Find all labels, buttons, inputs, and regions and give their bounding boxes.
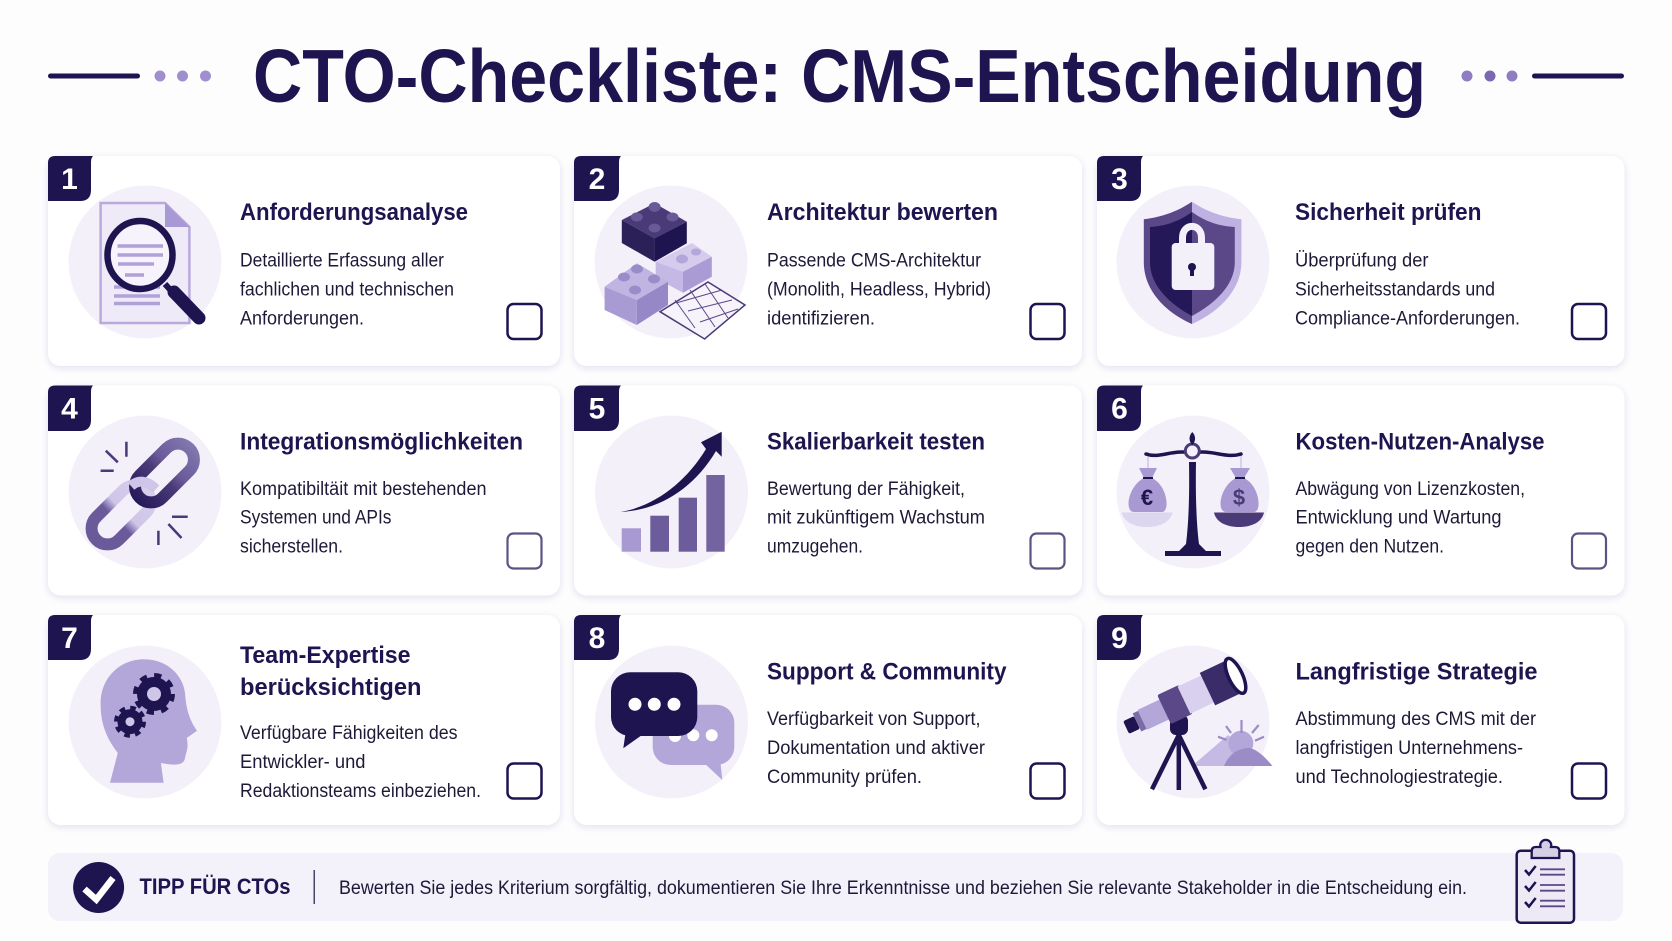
heading: Architektur bewerten — [767, 199, 998, 226]
panel: 5 Skalierbarkeit testen — [574, 386, 1082, 596]
heading: Integrationsmöglichkeiten — [240, 428, 523, 456]
description: Anforderungen. — [240, 308, 364, 330]
heading: Sicherheit prüfen — [1295, 199, 1482, 226]
header — [48, 34, 1624, 118]
heading: Kosten-Nutzen-Analyse — [1296, 428, 1544, 456]
panel: 1 Anforderungsanalyse — [48, 156, 560, 366]
description: Abstimmung des CMS mit der — [1296, 709, 1537, 730]
checkbox — [1030, 764, 1064, 798]
checkbox — [1030, 534, 1064, 568]
description: Passende CMS-Architektur — [767, 250, 982, 272]
heading: Team-Expertise — [240, 642, 410, 669]
description: mit zukünftigem Wachstum — [767, 508, 985, 528]
description — [240, 479, 486, 558]
icon: clipboard checklist — [1517, 840, 1574, 923]
icon: balance scale with money bags: € — [1141, 485, 1153, 510]
heading: Support & Community — [767, 658, 1007, 686]
description: Sicherheitsstandards und — [1295, 280, 1495, 300]
description — [767, 250, 991, 330]
description: Systemen und APIs — [240, 508, 392, 528]
checkbox — [1572, 764, 1606, 798]
description: gegen den Nutzen. — [1296, 536, 1444, 558]
heading: Anforderungsanalyse — [240, 199, 468, 226]
icon: head with gears — [68, 646, 222, 798]
tip label: TIPP FÜR CTOs — [140, 874, 290, 899]
number badge 3 — [1097, 156, 1143, 201]
number badge 2 — [574, 156, 621, 201]
number badge 4: 4 — [61, 392, 78, 426]
number badge 1 — [48, 156, 93, 201]
panel: 4 Integrationsmöglichkeiten — [48, 386, 560, 596]
tip bar — [48, 840, 1623, 923]
number badge 6: 6 — [1111, 392, 1128, 426]
icon: telescope with mountains and sun — [1116, 646, 1272, 798]
description: Community prüfen. — [767, 767, 922, 788]
icon: balance scale with money bags: $ — [1233, 485, 1245, 510]
left header ornament — [48, 70, 211, 82]
checkbox — [1572, 534, 1606, 568]
description: fachlichen und technischen — [240, 280, 454, 300]
description: Abwägung von Lizenzkosten, — [1296, 479, 1525, 500]
number badge 5 — [574, 386, 621, 431]
icon: building blocks and blueprint — [594, 186, 748, 339]
description — [240, 723, 481, 802]
checkbox — [508, 534, 542, 568]
number badge 6 — [1097, 386, 1143, 431]
description: Überprüfung der — [1295, 250, 1429, 272]
description: langfristigen Unternehmens- — [1296, 738, 1523, 759]
panel: 6 Kosten-Nutzen-Analyse — [1097, 386, 1624, 596]
description: sicherstellen. — [240, 536, 343, 558]
number badge 5: 5 — [589, 392, 605, 426]
panel: 9 Langfristige Strategie — [1097, 615, 1624, 825]
number badge 8 — [574, 615, 621, 660]
description — [767, 709, 986, 788]
description: und Technologiestrategie. — [1296, 767, 1503, 788]
description: Verfügbarkeit von Support, — [767, 709, 980, 730]
heading — [240, 642, 422, 701]
icon: check circle — [73, 862, 124, 913]
description: Kompatibiltäit mit bestehenden — [240, 479, 486, 500]
description — [240, 250, 454, 330]
icon: growth bar chart with arrow — [595, 416, 748, 568]
checkbox — [1030, 304, 1064, 339]
description — [1296, 709, 1537, 788]
description: Compliance-Anforderungen. — [1295, 308, 1520, 330]
heading: berücksichtigen — [240, 674, 422, 701]
description: identifizieren. — [767, 308, 875, 330]
description — [767, 479, 985, 558]
heading: Skalierbarkeit testen — [767, 428, 985, 456]
icon: shield with padlock — [1116, 186, 1270, 338]
number badge 1: 1 — [61, 163, 78, 196]
icon: speech bubbles — [595, 646, 748, 798]
number badge 9: 9 — [1111, 622, 1128, 655]
description — [1296, 479, 1525, 558]
heading: Langfristige Strategie — [1296, 658, 1538, 686]
panel: 8 Support & Community — [574, 615, 1082, 825]
description — [1295, 250, 1520, 330]
description: Redaktionsteams einbeziehen. — [240, 781, 481, 802]
icon: document with magnifying glass — [68, 186, 222, 338]
description: Dokumentation und aktiver — [767, 738, 986, 759]
number badge 3: 3 — [1111, 163, 1128, 196]
checkbox — [1572, 304, 1606, 339]
description: (Monolith, Headless, Hybrid) — [767, 280, 991, 300]
number badge 4 — [48, 386, 93, 431]
checkbox — [508, 304, 542, 339]
number badge 8: 8 — [589, 622, 605, 655]
right header ornament — [1462, 70, 1624, 82]
description: Entwickler- und — [240, 752, 366, 773]
number badge 7: 7 — [61, 622, 78, 655]
icon: balance scale with money bags — [1116, 416, 1270, 568]
description: Detaillierte Erfassung aller — [240, 250, 445, 272]
panel: 7 Team-Expertise berücksichtigen — [48, 615, 560, 825]
checkbox — [508, 764, 542, 798]
panel: 3 Sicherheit prüfen — [1097, 156, 1624, 366]
description: umzugehen. — [767, 536, 863, 558]
number badge 2: 2 — [589, 163, 605, 196]
description: Bewertung der Fähigkeit, — [767, 479, 965, 500]
title: CTO-Checkliste: CMS-Entscheidung — [253, 34, 1426, 118]
description: Verfügbare Fähigkeiten des — [240, 723, 458, 744]
icon: chain links — [68, 416, 222, 568]
tip text: Bewerten Sie jedes Kriterium sorgfältig, dokumentieren Sie Ihre Erkenntnisse und beziehen Sie relevante Stakeholder in die Entscheidung ein. — [339, 878, 1467, 899]
description: Entwicklung und Wartung — [1296, 508, 1502, 528]
panel: 2 Architektur bewerten — [574, 156, 1082, 366]
number badge 7 — [48, 615, 93, 660]
number badge 9 — [1097, 615, 1143, 660]
